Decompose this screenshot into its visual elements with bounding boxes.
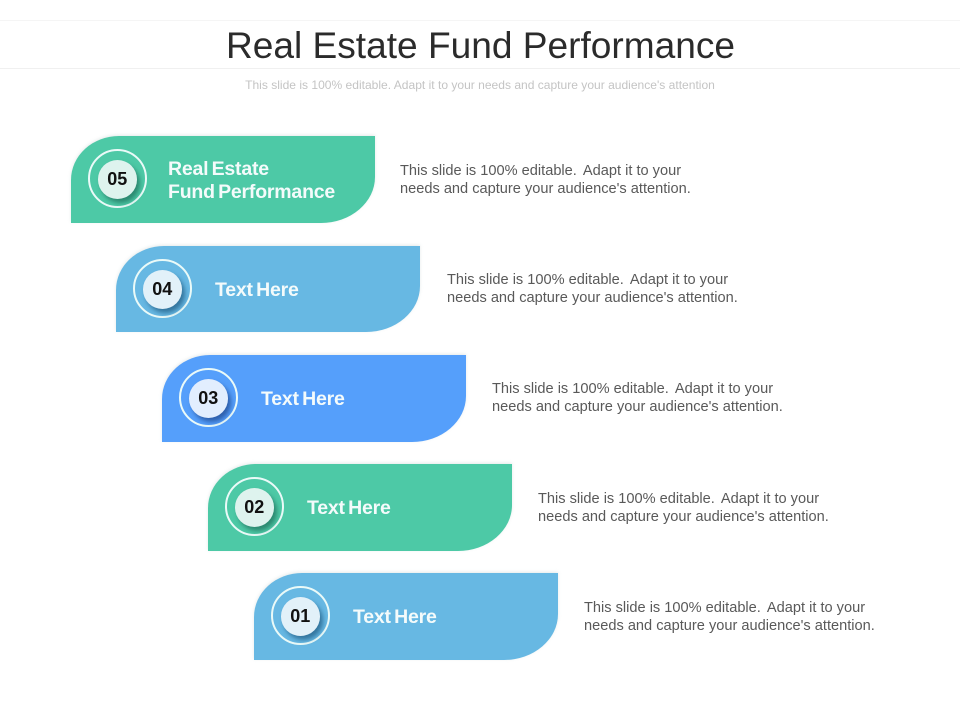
number 04 bbox=[142, 270, 182, 308]
row 02 bbox=[207, 462, 829, 551]
description: step 02: This slide is 100% editable. Adapt it to your bbox=[538, 491, 819, 507]
label: step 02: Text Here bbox=[307, 497, 391, 519]
description: step 01: needs and capture your audience's attention. bbox=[584, 618, 875, 634]
description: step 03: This slide is 100% editable. Adapt it to your bbox=[492, 381, 773, 397]
number 02 bbox=[234, 488, 274, 527]
row 01 bbox=[253, 571, 875, 660]
description: step 05: needs and capture your audience's attention. bbox=[400, 181, 691, 197]
icon: ring 01 bbox=[270, 586, 330, 645]
description: step 04: needs and capture your audience's attention. bbox=[447, 290, 738, 306]
panel: step 03 band bbox=[162, 355, 466, 442]
subtitle: This slide is 100% editable. Adapt it to your needs and capture your audience's attention bbox=[245, 78, 715, 92]
description: step 03: needs and capture your audience's attention. bbox=[492, 399, 783, 415]
row 03 bbox=[161, 353, 783, 442]
number 02: 02 bbox=[244, 497, 264, 517]
description: step 02 bbox=[538, 491, 829, 525]
number 03 bbox=[188, 379, 228, 418]
row 05 bbox=[70, 134, 691, 223]
number 05 bbox=[98, 160, 137, 199]
description: step 05: This slide is 100% editable. Adapt it to your bbox=[400, 163, 681, 179]
panel: step 01 band bbox=[254, 573, 558, 660]
number 01: 01 bbox=[290, 606, 310, 626]
number 04: 04 bbox=[152, 278, 172, 298]
description: step 04 bbox=[447, 272, 738, 306]
description: step 02: needs and capture your audience's attention. bbox=[538, 509, 829, 525]
number 05: 05 bbox=[107, 169, 127, 189]
icon: ring 05 bbox=[88, 149, 146, 208]
number 01 bbox=[280, 597, 320, 636]
description: step 01: This slide is 100% editable. Adapt it to your bbox=[584, 600, 865, 616]
label: step 01: Text Here bbox=[353, 606, 437, 628]
row 04 bbox=[115, 244, 738, 332]
icon: ring 03 bbox=[178, 368, 238, 427]
description: step 01 bbox=[584, 600, 875, 634]
label: step 03: Text Here bbox=[261, 388, 345, 410]
label: step 05: Fund Performance bbox=[168, 181, 335, 203]
panel: step 05 band bbox=[71, 136, 375, 222]
description: step 05 bbox=[400, 163, 691, 197]
panel: step 04 band bbox=[116, 246, 420, 332]
description: step 03 bbox=[492, 381, 783, 415]
number 03: 03 bbox=[198, 388, 218, 408]
label: step 05: Real Estate bbox=[168, 158, 269, 180]
title: Real Estate Fund Performance bbox=[226, 24, 735, 66]
panel: step 02 band bbox=[208, 464, 512, 550]
icon: ring 04 bbox=[132, 258, 192, 318]
label: step 04: Text Here bbox=[215, 279, 299, 301]
icon: ring 02 bbox=[224, 477, 284, 536]
description: step 04: This slide is 100% editable. Adapt it to your bbox=[447, 272, 728, 288]
label: step 05 bbox=[168, 158, 335, 203]
